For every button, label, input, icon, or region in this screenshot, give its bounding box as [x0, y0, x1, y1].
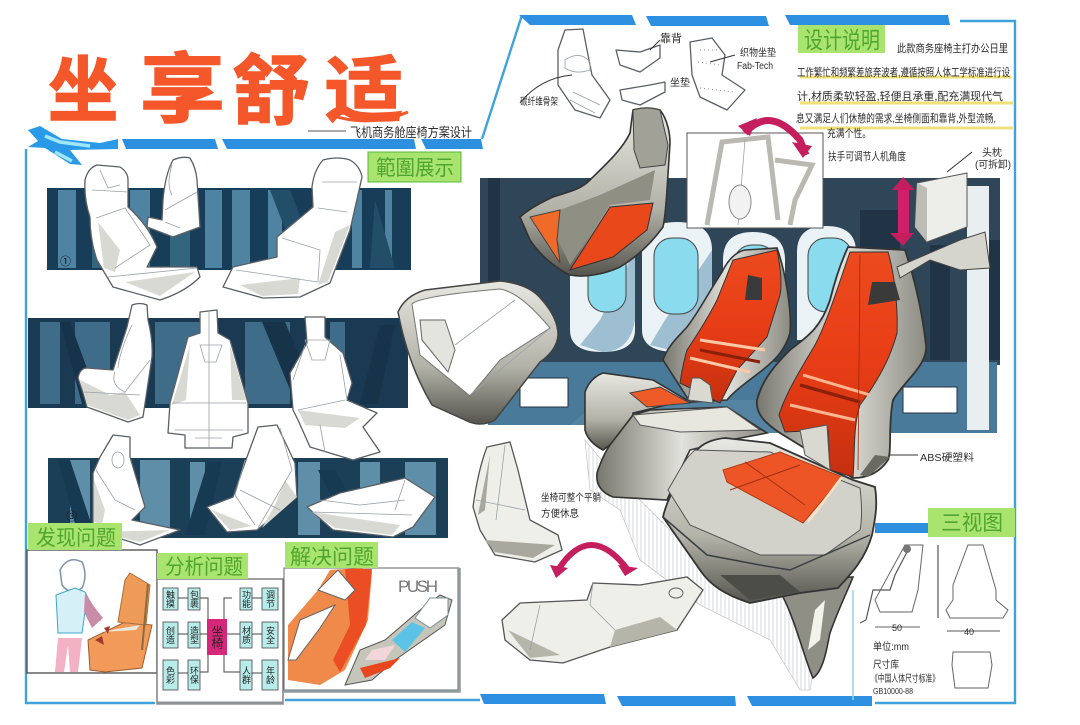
- sketch: seat 3 cushion: [307, 478, 435, 537]
- text: lay-flat note: 方便休息: [541, 507, 579, 520]
- text: lay-flat note: [541, 491, 601, 520]
- title: 坐: [48, 52, 118, 132]
- sketch: large cushion: [398, 281, 558, 424]
- sketch: headrest: [915, 152, 972, 242]
- panel: design description: 计,材质柔软轻盈,轻便且承重,配充满现代气: [797, 89, 1003, 103]
- diagram: seat analysis tree: 安全: [265, 625, 275, 644]
- diagram: seat analysis tree: [163, 588, 278, 690]
- label: range display: [368, 152, 461, 182]
- arrow: pink rotation top: [738, 118, 812, 158]
- sketch: detail seat exploded: [520, 29, 610, 118]
- diagram: seat analysis tree: 材质: [241, 625, 251, 645]
- text: unit and standard: 《中国人体尺寸标准》: [871, 672, 939, 685]
- sketch: cushion part: 坐垫: [670, 76, 690, 89]
- text: headrest note: 头枕: [982, 146, 1002, 159]
- panel: analyze problem: [157, 553, 283, 704]
- panel: solve problem: [284, 542, 459, 691]
- diagram: seat analysis tree: 色彩: [165, 665, 175, 685]
- panel: range display backdrop 3: [48, 458, 448, 538]
- sketch: fabric seat: 织物坐垫: [740, 46, 776, 59]
- sketch: seat 2 rear: [290, 317, 380, 460]
- diagram: seat analysis tree: 创造: [165, 625, 175, 645]
- callout: ABS plastic: [890, 451, 974, 464]
- sketch: seat 1 mirrored: [223, 158, 362, 298]
- sketch: seat 2 front: [168, 310, 248, 448]
- icon: blue airplane: [28, 126, 118, 165]
- sketch: fabric seat: [690, 38, 776, 110]
- sketch: side view with figure: 50: [892, 623, 902, 633]
- sketch: fabric seat: Fab-Tech: [737, 61, 773, 72]
- sketch: backrest part: [616, 31, 682, 72]
- sketch: seat 1 front three-quarter: [60, 165, 200, 300]
- sketch: seat 1 side: [147, 157, 200, 237]
- panel: range display backdrop 1: [47, 188, 411, 270]
- text: unit and standard: 尺寸库: [873, 658, 899, 671]
- illustration: main seat lower tail: [783, 577, 853, 678]
- cabin slot right: [903, 387, 957, 413]
- sketch: front view: [938, 545, 1008, 637]
- illustration: floating seat: [520, 108, 670, 276]
- panel: design description: 工作繁忙和频繁差旅奔波者,遵循按照人体工学标准进行设: [797, 65, 1010, 79]
- panel: range display backdrop 2: [28, 318, 408, 408]
- diagram: seat analysis tree: 触摸: [165, 589, 175, 609]
- title: 舒: [232, 50, 310, 135]
- panel: design description: 充满个性。: [827, 126, 871, 140]
- illustration: main seat cushion base: [663, 438, 876, 603]
- window arch 3: [723, 232, 785, 340]
- illustration: rear seat back: [663, 248, 790, 403]
- title: 适: [325, 52, 403, 132]
- diagram: seat analysis tree: 人群: [241, 666, 251, 685]
- sketch: detail seat exploded: 碳纤维骨架: [520, 95, 558, 108]
- window arch 1: [570, 220, 635, 352]
- sketch: backrest part: 靠背: [660, 31, 682, 45]
- diagram: seat analysis tree: 年龄: [265, 665, 275, 685]
- text: unit and standard: 单位:mm: [873, 640, 909, 653]
- sketch: cushion part: [620, 76, 690, 105]
- diagram: seat analysis tree: 功能: [241, 590, 251, 609]
- illustration: orange seat close-up: [288, 568, 372, 685]
- sketch: seat 1 front three-quarter: ①: [60, 255, 71, 268]
- panel: detail inset: [687, 133, 823, 228]
- panel: discover problem: [27, 523, 157, 673]
- illustration: main seat orange cushion: [723, 452, 842, 523]
- cabin white strip: [967, 186, 989, 430]
- text: headrest note: [975, 146, 1011, 171]
- cabin slot left: [520, 378, 568, 407]
- arrow: pink vertical: [890, 177, 915, 246]
- text: lay-flat note: 坐椅可整个平躺: [541, 491, 601, 504]
- text: unit and standard: GB10000-88: [873, 687, 913, 696]
- sketch: side view with figure: [860, 545, 923, 633]
- sketch: lay-flat seat: [502, 577, 703, 663]
- panel: design description: 息又满足人们休憩的需求,坐椅侧面和靠背,外型流畅,: [796, 111, 996, 125]
- label: solve problem: 解决问题: [290, 546, 374, 569]
- sketch: top view: [952, 652, 992, 688]
- subtitle: 飞机商务舱座椅方案设计: [350, 125, 472, 140]
- illustration: man with broken seat: [55, 560, 152, 672]
- title: 享: [140, 48, 225, 133]
- label: design description: 设计说明: [804, 27, 880, 53]
- diagram: seat analysis tree: 包裹: [189, 589, 199, 609]
- illustration: rear seat base and armrest: [585, 373, 767, 500]
- text: headrest note: (可拆卸): [975, 158, 1011, 171]
- label: three views: 三视图: [941, 512, 1003, 535]
- title: [48, 48, 408, 135]
- sketch: seat 3 side back: [66, 435, 180, 545]
- panel: design description: 此款商务座椅主打办公日里: [897, 41, 1008, 55]
- label: range display: 範圍展示: [376, 157, 454, 180]
- panel: design description: [796, 25, 1013, 163]
- illustration: reclining woman: [345, 595, 452, 685]
- window arch 2: [642, 222, 712, 352]
- panel: design description: 扶手可调节人机角度: [828, 149, 906, 163]
- label: three views: [928, 508, 1015, 537]
- sketch: seat 3 side back: ③: [66, 510, 77, 523]
- sketch: medium seat: [473, 442, 562, 562]
- diagram: seat analysis tree: 造型: [189, 625, 199, 644]
- panel: cabin backdrop: [480, 178, 1000, 433]
- hatch: main seat shadow: [585, 440, 815, 690]
- text: push: PUSH: [398, 577, 438, 596]
- panel: three views: [853, 508, 1015, 700]
- sketch: side rest: [897, 232, 990, 278]
- label: analyze problem: 分析问题: [165, 556, 243, 579]
- sketch: front view: 40: [964, 627, 974, 637]
- label: discover problem: 发现问题: [36, 527, 116, 550]
- text: unit and standard: [871, 640, 939, 696]
- diagram: seat analysis tree: 坐椅: [210, 625, 224, 649]
- sketch: seat 3 curved back: [207, 425, 297, 532]
- illustration: main seat back: [757, 247, 926, 478]
- callout: ABS plastic: ABS硬塑料: [920, 451, 974, 464]
- window arch 4: [797, 226, 856, 340]
- arrow: pink rotation bottom: [550, 545, 638, 578]
- diagram: seat analysis tree: 环保: [189, 666, 199, 685]
- diagram: seat analysis tree: 调节: [265, 590, 275, 609]
- sketch: seat 2 side: [78, 304, 152, 422]
